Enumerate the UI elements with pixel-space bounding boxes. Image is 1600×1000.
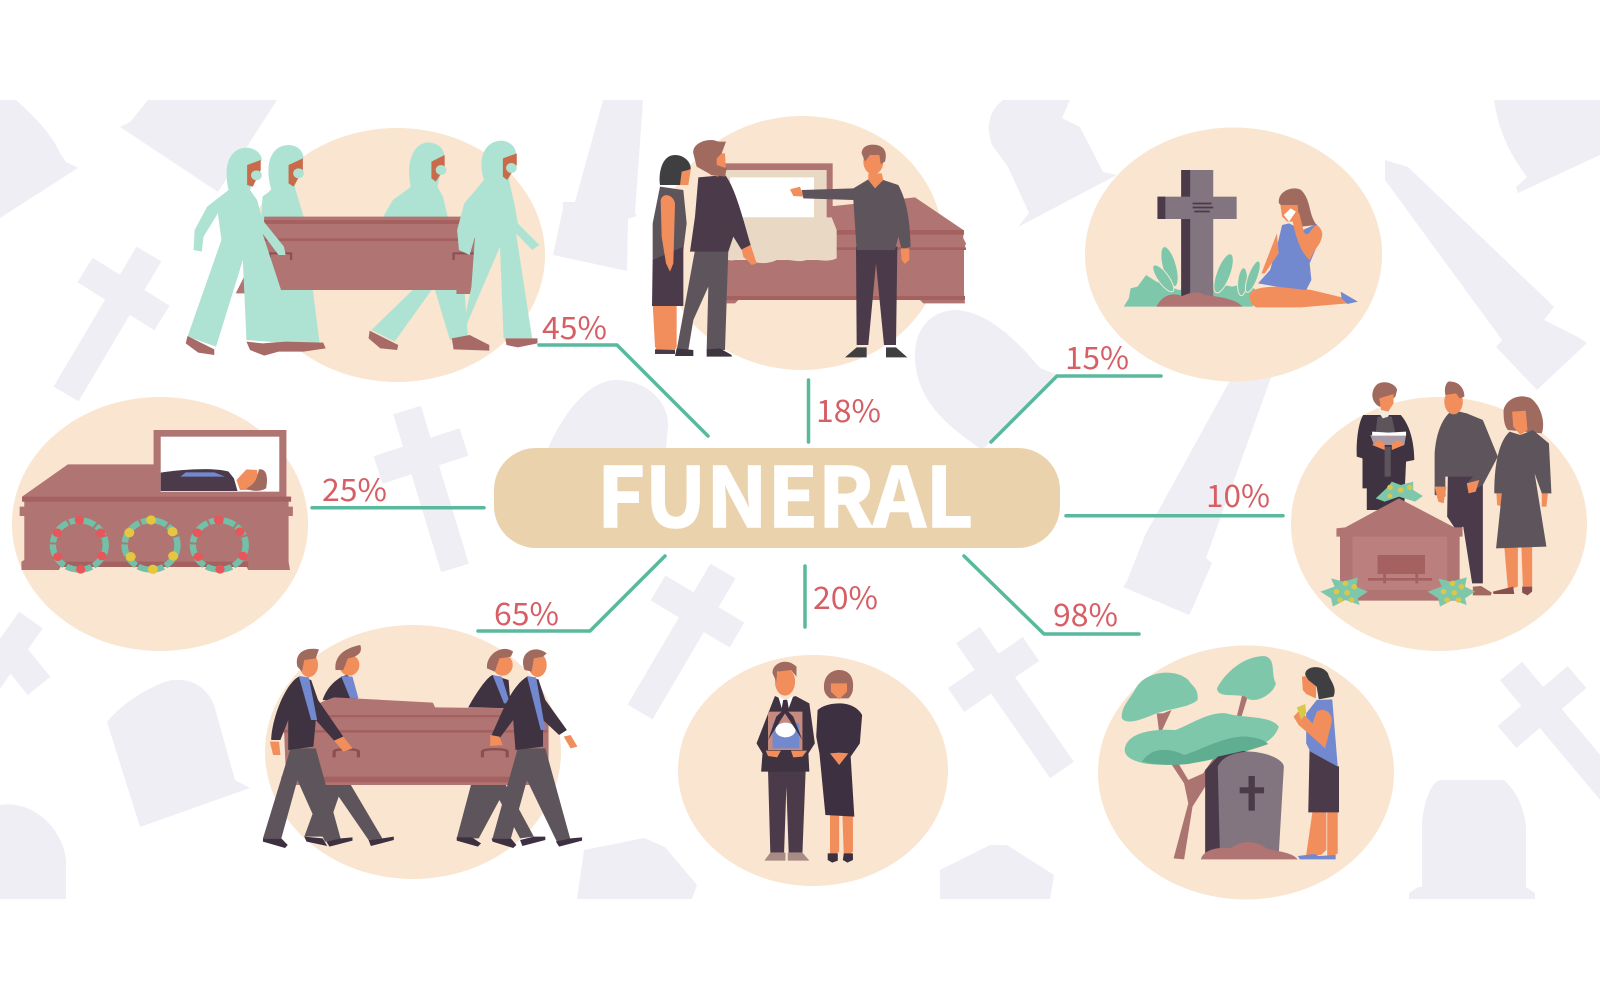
percentage labels: 45%: [542, 303, 607, 348]
scene: priest and mourners at coffin: [1320, 381, 1551, 607]
panel: central title pill: [494, 432, 1060, 551]
scene: woman at gravestone under trees: [1122, 656, 1339, 859]
scene: open coffin with wreaths: [20, 430, 293, 574]
scene: couple with portrait: [757, 662, 862, 863]
percentage labels: 18%: [816, 386, 881, 431]
background pattern: tombstones and crosses: [0, 100, 1600, 899]
percentage labels: 65%: [494, 589, 559, 634]
percentage labels: 98%: [1053, 590, 1118, 635]
percentage labels: 15%: [1065, 333, 1129, 378]
connector lines: [312, 345, 1283, 634]
scene: family viewing open coffin: [652, 140, 966, 357]
title: FUNERAL: [597, 432, 973, 551]
percentage labels: 10%: [1206, 471, 1270, 516]
percentage labels: [322, 303, 1270, 635]
scene: pallbearers in black suits: [263, 645, 582, 848]
scene: pallbearers in protective suits: [186, 141, 539, 356]
panel: backdrop circles: [12, 116, 1587, 900]
scene: woman crying at cross: [1124, 170, 1358, 307]
percentage labels: 25%: [322, 465, 387, 510]
percentage labels: 20%: [813, 573, 878, 618]
